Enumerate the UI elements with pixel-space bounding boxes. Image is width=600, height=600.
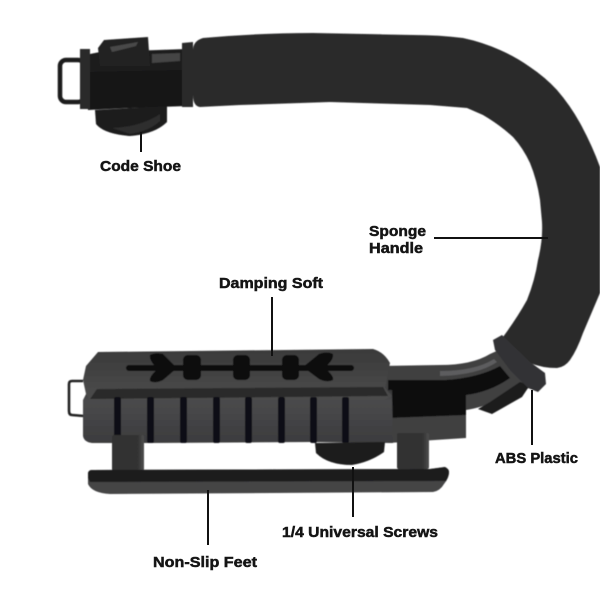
illustration: stabilizer product <box>60 33 600 494</box>
side wall <box>83 390 393 443</box>
callout: damping soft <box>219 275 323 356</box>
non-slip foot plate <box>88 467 449 494</box>
strap loop <box>60 60 84 102</box>
callout: non-slip feet: Non-Slip Feet <box>153 554 257 571</box>
callout: code shoe <box>100 132 181 175</box>
side ridges <box>114 397 349 443</box>
callout: non-slip feet <box>153 490 257 571</box>
callout: sponge handle <box>369 223 548 257</box>
callout: universal screws: 1/4 Universal Screws <box>282 524 438 541</box>
grip body <box>69 349 393 443</box>
collar ring <box>182 42 193 107</box>
callout: abs plastic <box>495 390 578 467</box>
callout: sponge handle: Handle <box>369 240 423 257</box>
slot rail <box>126 352 354 382</box>
thumb wheel <box>95 106 167 136</box>
foot brackets <box>112 433 429 471</box>
quarter-inch screw wheel <box>315 442 385 465</box>
cold shoe mount <box>60 37 193 136</box>
rubber collar <box>493 335 546 392</box>
callout: damping soft: Damping Soft <box>219 275 323 292</box>
callout: abs plastic: ABS Plastic <box>495 450 578 467</box>
top plate <box>83 349 392 400</box>
callout: code shoe: Code Shoe <box>100 158 181 175</box>
callout: sponge handle: Sponge <box>369 223 426 240</box>
arm: plastic connector <box>380 345 535 443</box>
sponge handle <box>193 33 600 368</box>
mount body <box>84 68 187 110</box>
strap loop <box>69 381 84 416</box>
